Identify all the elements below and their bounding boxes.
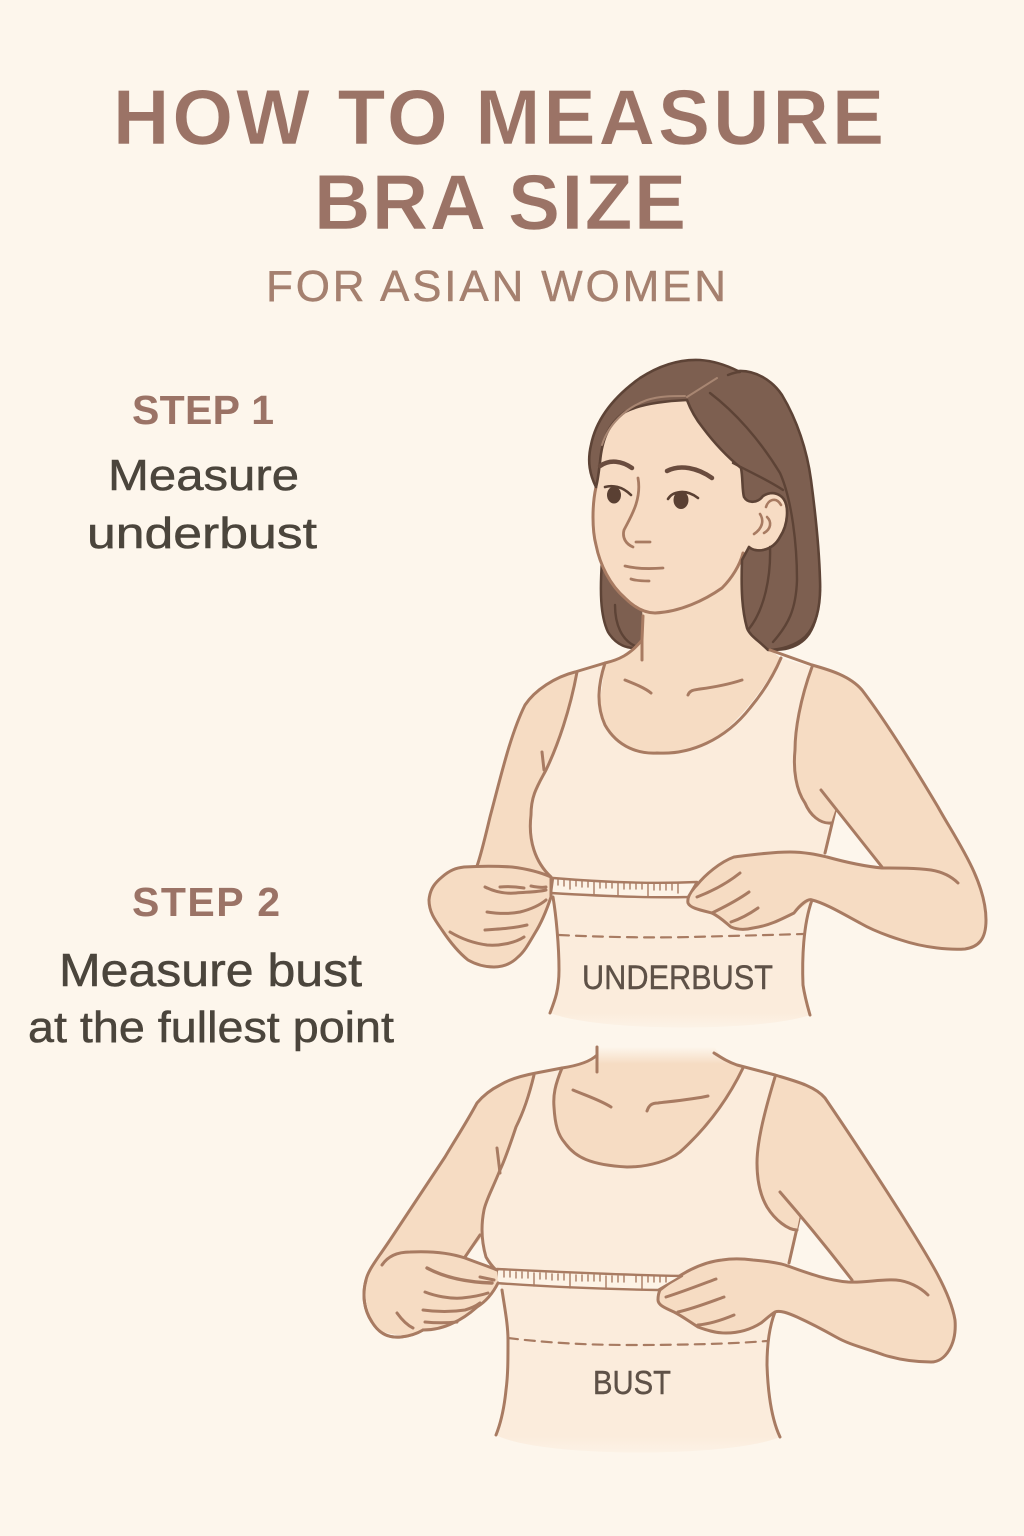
step 2 description: Measure bust: [59, 944, 362, 996]
eyebrows: [600, 462, 712, 478]
title: BRA SIZE: [314, 158, 686, 246]
neck and chest skin: [600, 560, 781, 754]
underbust dashed line: [559, 934, 803, 937]
nose and mouth: [623, 478, 663, 581]
outlines: [364, 1047, 800, 1437]
title: [113, 73, 884, 246]
step 2 heading: STEP 2: [132, 879, 280, 925]
title: HOW TO MEASURE: [113, 73, 884, 161]
tank top: [530, 658, 836, 1028]
left hand: [429, 866, 551, 967]
bust dashed line: [508, 1338, 767, 1345]
figure 2: woman measuring bust: [364, 1046, 955, 1453]
right arm and hand: [658, 1075, 955, 1362]
right arm and hand: [688, 665, 986, 949]
step 2 text: [28, 879, 394, 1052]
face: [593, 390, 787, 613]
back hair: [601, 500, 820, 650]
step 2 description: at the fullest point: [28, 1003, 394, 1052]
step 1 description: Measure: [108, 451, 299, 500]
eyes: [605, 486, 698, 509]
face outline: [593, 487, 743, 613]
subtitle: FOR ASIAN WOMEN: [266, 262, 726, 311]
hair strands: [615, 372, 797, 646]
measuring tape: [496, 1269, 682, 1290]
step 1 text: [87, 387, 317, 558]
step 2 description: [28, 944, 394, 1052]
ear: [749, 493, 787, 550]
face and hair: [589, 360, 820, 650]
neck and chest skin: [554, 1046, 743, 1167]
left arm: [366, 1073, 536, 1295]
tank outlines: [477, 616, 836, 1015]
step 1 description: [87, 451, 317, 558]
left hand: [364, 1252, 498, 1337]
measuring tape: [551, 878, 697, 897]
figure 1: woman measuring underbust: [429, 360, 986, 1028]
bust label: BUST: [593, 1364, 671, 1401]
step 1 heading: STEP 1: [132, 387, 274, 433]
step 1 description: underbust: [87, 509, 317, 558]
tank top: [483, 1068, 800, 1453]
front hair: [589, 360, 820, 650]
left arm: [477, 672, 585, 880]
underbust label: UNDERBUST: [582, 959, 773, 997]
